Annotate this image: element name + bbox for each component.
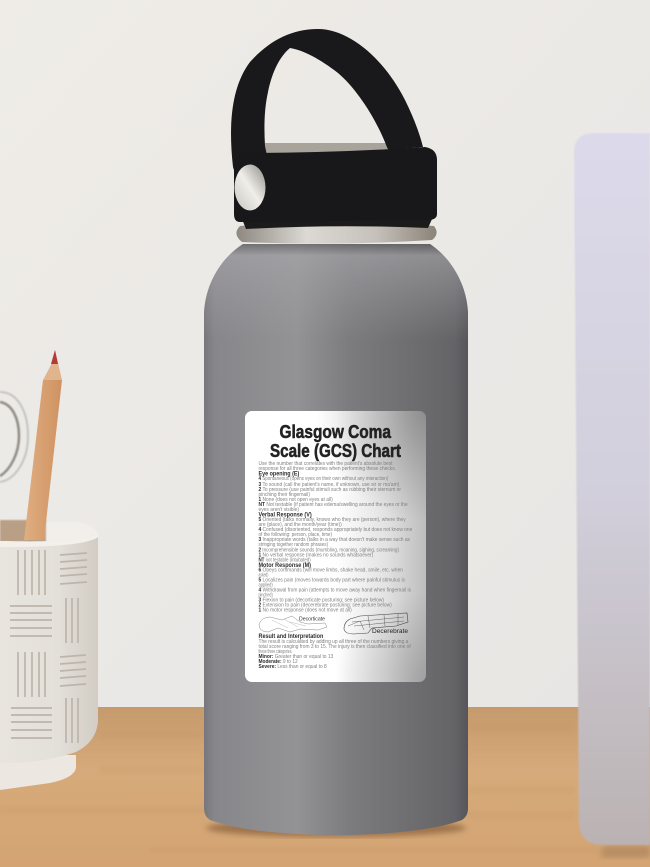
diagram: decerebrate posture (344, 613, 408, 635)
section: eye opening: Eye opening (E) (258, 470, 299, 477)
mug body (0, 533, 98, 763)
section: motor response: 3 Flexion to pain (decorticate posturing; see picture below) (258, 598, 384, 604)
section: verbal response: 2 Incomprehensible sounds (mumbling, moaning, sighing, screaming) (258, 547, 399, 553)
section: verbal response: 3 Inappropriate words (talks in a way that doesn't make sense such as (258, 537, 410, 543)
handle strap (231, 29, 423, 211)
section: verbal response: stringing together random phrases) (258, 542, 328, 548)
section: result and interpretation: these three categories. (258, 649, 292, 655)
section: motor response: Motor Response (M) (258, 562, 311, 569)
section: motor response (258, 562, 411, 614)
section: result and interpretation: total score ranging from 3 to 15. The injury is then classified into one of (258, 644, 411, 650)
laptop (574, 133, 650, 858)
section: verbal response (258, 511, 412, 564)
metal button (234, 164, 266, 210)
section: verbal response: of the following: person, place, time) (258, 532, 332, 538)
section: eye opening: 3 To sound (call the patient's name, if unknown, use sir or ma'am) (258, 482, 399, 488)
section: motor response: 4 Withdrawal from pain (attempts to move away hand when fingernail is (258, 588, 411, 594)
section: result and interpretation: The result is calculated by adding up all three of the numbers giving a (258, 639, 408, 645)
sticker title (270, 422, 401, 461)
wooden desk (0, 707, 650, 867)
section: eye opening: NT Not testable (if patient has edema/swelling around the eyes or the (258, 502, 408, 508)
section: eye opening: 1 None (does not open eyes at all) (258, 497, 333, 503)
section: eye opening: pinching their fingernail) (258, 492, 310, 498)
section: verbal response: 5 Oriented (talks normally, knows who they are (person), where they (258, 517, 406, 523)
section: motor response: applied) (258, 583, 273, 589)
section: eye opening: 4 Spontaneous (opens eyes on their own without any interaction) (258, 476, 388, 482)
mug (0, 533, 98, 790)
section: eye opening (258, 470, 408, 513)
sticker intro text: response for all three categories when performing these checks. (258, 466, 396, 472)
section: verbal response: NT not testable (intubated) (258, 558, 311, 564)
section: motor response: 2 Extension to pain (decerebrate posturing; see picture below) (258, 603, 392, 609)
section: verbal response: 1 No verbal response (makes no sounds whatsoever) (258, 553, 373, 559)
section: result and interpretation: Severe: Less than or equal to 8 (258, 664, 327, 670)
sticker title: Scale (GCS) Chart (270, 441, 401, 461)
sticker intro text (258, 461, 396, 472)
bottle body (204, 244, 468, 835)
section: eye opening: 2 To pressure (use painful stimuli such as rubbing their sternum or (258, 487, 401, 493)
section: verbal response: 4 Confused (disoriented, responds appropriately but does not know one (258, 527, 412, 533)
sticker title: Glasgow Coma (280, 422, 392, 442)
section: result and interpretation: Minor: Greater than or equal to 13 (258, 654, 333, 660)
section: motor response: pinched) (258, 593, 273, 599)
sticker background (245, 411, 426, 682)
diagram: decorticate posture: Decorticate (299, 616, 325, 622)
diagram: decorticate posture (259, 616, 327, 632)
water bottle (204, 29, 468, 837)
bottle shadow (206, 819, 466, 837)
cap (234, 147, 437, 222)
section: eye opening: eyes aren't visible) (258, 507, 299, 513)
mug pattern (10, 550, 87, 743)
sticker intro text: Use the number that correlates with the patient's absolute best (258, 461, 393, 467)
pencil (24, 350, 62, 540)
glass object (0, 392, 28, 482)
section: result and interpretation: Moderate: 9 to 12 (258, 659, 298, 665)
section: motor response: 5 Localizes pain (moves towards body part where painful stimulus is (258, 578, 405, 584)
diagram: decerebrate posture: Decerebrate (372, 628, 408, 635)
section: result and interpretation: Result and Interpretation (258, 633, 324, 640)
mug back interior (0, 520, 98, 545)
section: motor response: asked) (258, 573, 268, 579)
section: verbal response: Verbal Response (V) (258, 511, 312, 518)
sticker (245, 411, 426, 682)
mug foot (0, 755, 76, 790)
lid top (265, 143, 387, 153)
section: verbal response: are (place), and the month/year (time)) (258, 522, 342, 528)
section: motor response: 6 Obeys commands (will move limbs, shake head, smile, etc. when (258, 568, 403, 574)
section: result and interpretation (258, 633, 411, 670)
section: motor response: 1 No motor response (does not move at all) (258, 608, 352, 614)
bottle neck ring (236, 222, 437, 244)
